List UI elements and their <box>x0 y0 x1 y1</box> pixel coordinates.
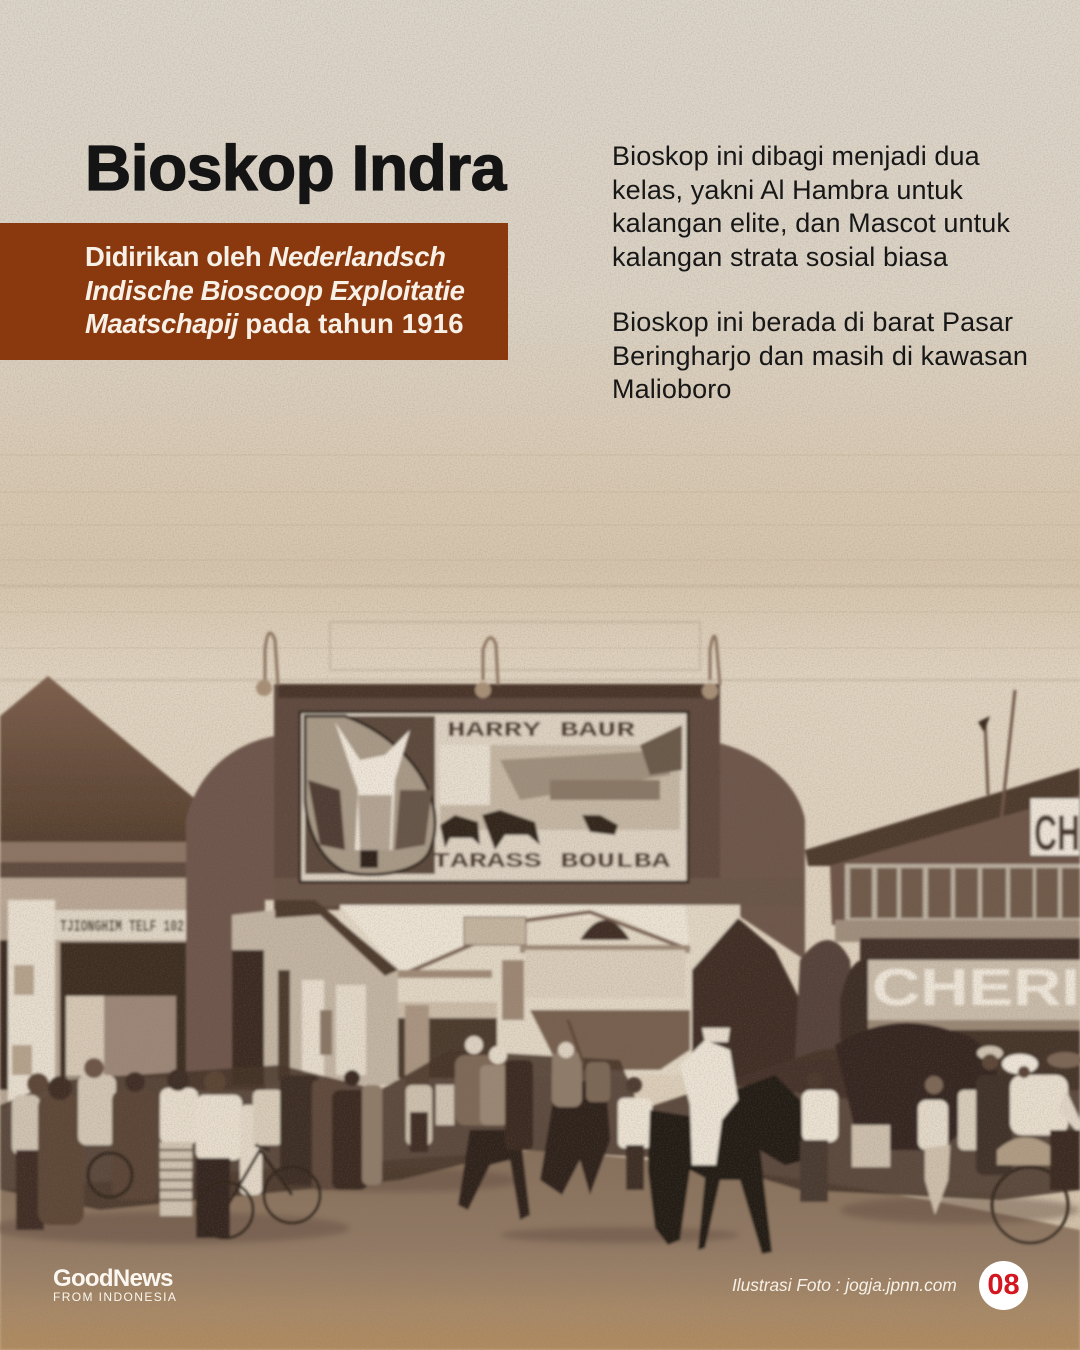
horses and riders centre <box>455 1020 838 1254</box>
gate wings <box>186 736 275 1090</box>
title: Bioskop Indra <box>85 132 506 204</box>
text block: cinema location: Bioskop ini berada di barat Pasar <box>612 307 1013 337</box>
founder text: Maatschapij pada tahun 1916 <box>85 308 464 339</box>
founder text <box>85 241 465 339</box>
text block: cinema classes: kelas, yakni Al Hambra untuk <box>612 174 963 204</box>
ground shadows <box>0 1168 1080 1244</box>
founder text: Didirikan oleh Nederlandsch <box>85 241 446 272</box>
left house roof <box>0 676 194 842</box>
right building <box>805 768 1080 866</box>
bushes <box>835 1023 1000 1150</box>
photo background: street scene with cinema gate: TJIONGHIM TELF 102 <box>60 918 184 937</box>
billboard <box>300 712 688 882</box>
photo background: street scene with cinema gate: HARRY BAUR <box>447 720 636 743</box>
inner gate area <box>340 905 740 1075</box>
founder text: Indische Bioscoop Exploitatie <box>85 274 465 306</box>
dark right arch <box>692 918 858 1100</box>
logo: GoodNews from Indonesia: FROM INDONESIA <box>53 1290 177 1304</box>
road <box>0 1150 1080 1350</box>
lamps <box>265 633 720 685</box>
text block: cinema location: Malioboro <box>612 374 731 404</box>
text block: cinema classes: kalangan elite, dan Mascot untuk <box>612 208 1010 238</box>
text block: cinema classes <box>612 141 1010 272</box>
page number badge: 08 <box>987 1269 1020 1301</box>
people right <box>918 1046 1080 1215</box>
page number badge <box>979 1261 1028 1310</box>
left colonnade <box>232 905 398 1085</box>
text block: cinema location: Beringharjo dan masih di kawasan <box>612 340 1028 370</box>
logo: GoodNews from Indonesia <box>53 1265 177 1304</box>
text block: cinema classes: kalangan strata sosial biasa <box>612 242 948 272</box>
panel: founder band <box>0 223 508 360</box>
photo credit: Ilustrasi Foto : jogja.jpnn.com <box>732 1275 957 1295</box>
photo background: street scene with cinema gate: CHERI <box>872 959 1080 1017</box>
big horse <box>648 1075 805 1254</box>
text block: cinema location <box>612 307 1028 404</box>
crowd band <box>0 1030 1080 1210</box>
bicycles <box>88 1145 1068 1243</box>
gate top <box>274 684 720 910</box>
wires <box>0 586 1080 680</box>
people left <box>12 1058 454 1238</box>
photo background: street scene with cinema gate: TARASS BOULBA <box>432 851 671 874</box>
logo: GoodNews from Indonesia: GoodNews <box>53 1265 173 1292</box>
text block: cinema classes: Bioskop ini dibagi menjadi dua <box>612 141 980 171</box>
